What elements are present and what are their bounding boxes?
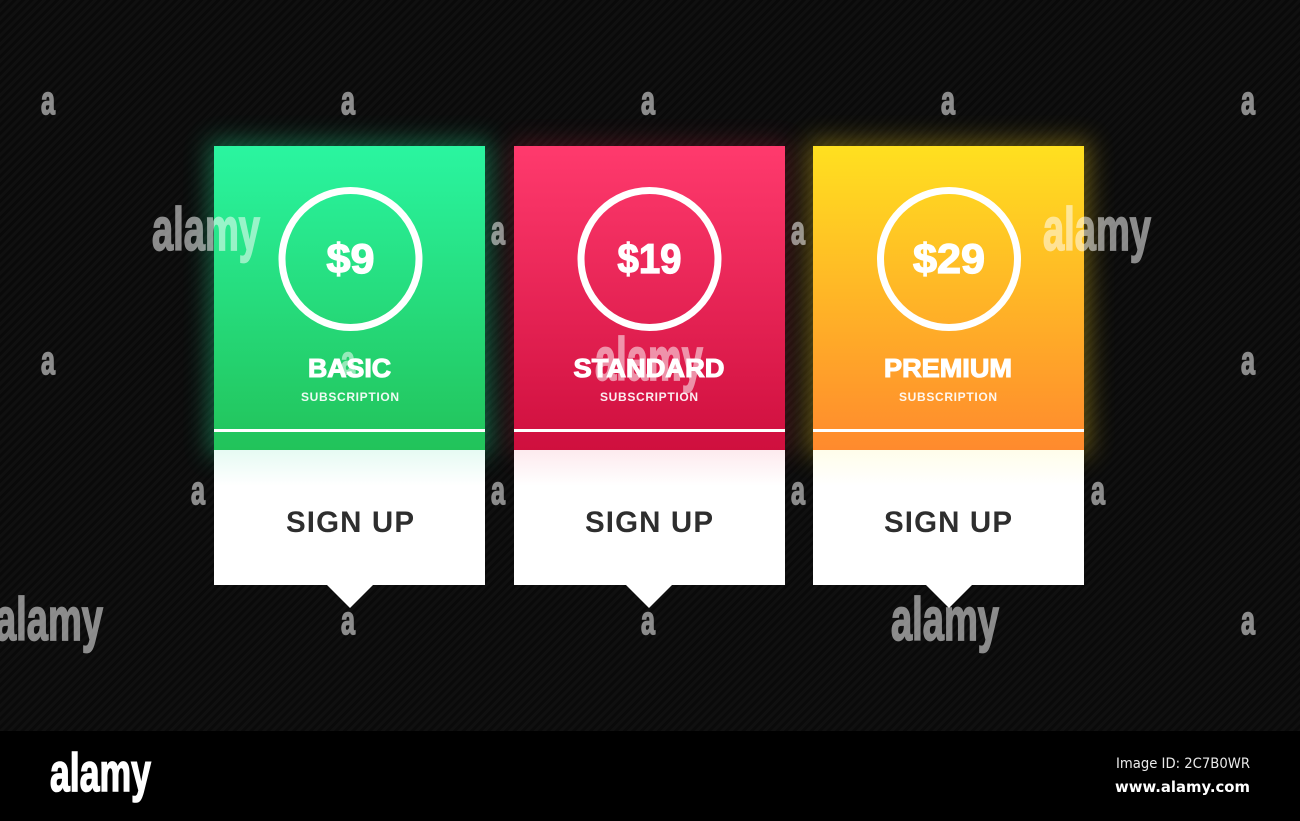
watermark overlay: a <box>491 209 505 253</box>
watermark overlay: a <box>641 599 655 643</box>
premium plan name: PREMIUM <box>884 353 1012 383</box>
watermark overlay: alamy <box>0 586 103 653</box>
watermark overlay <box>0 79 1255 653</box>
standard subscription label: SUBSCRIPTION <box>600 390 698 404</box>
basic subscription label: SUBSCRIPTION <box>301 390 399 404</box>
watermark overlay: a <box>1241 79 1255 123</box>
standard header background <box>514 146 785 450</box>
website: www.alamy.com <box>1115 778 1250 796</box>
panel: premium plan <box>813 146 1084 608</box>
premium header background <box>813 146 1084 450</box>
glow: yellow card <box>807 140 1090 456</box>
premium fade under header <box>813 450 1084 486</box>
premium sign up label: SIGN UP <box>884 506 1012 539</box>
basic price circle <box>282 190 419 328</box>
watermark overlay: a <box>341 79 355 123</box>
watermark overlay: a <box>341 339 355 383</box>
basic plan name: BASIC <box>308 353 391 383</box>
basic fade under header <box>214 450 485 486</box>
basic divider line <box>214 429 485 432</box>
basic header background <box>214 146 485 450</box>
standard price: $19 <box>618 235 682 282</box>
watermark overlay: a <box>341 599 355 643</box>
panel: standard plan <box>514 146 785 608</box>
watermark overlay: a <box>191 469 205 513</box>
glow: green card <box>208 140 491 456</box>
watermark overlay: a <box>941 79 955 123</box>
basic sign up label: SIGN UP <box>286 506 414 539</box>
basic sign up box <box>214 450 485 608</box>
watermark overlay: a <box>1241 599 1255 643</box>
premium subscription label: SUBSCRIPTION <box>899 390 997 404</box>
watermark overlay: alamy <box>891 586 999 653</box>
footer logo: alamy <box>50 743 151 803</box>
standard price circle <box>581 190 718 328</box>
footer bar <box>0 731 1300 821</box>
standard plan name: STANDARD <box>574 353 724 383</box>
watermark overlay: alamy <box>152 196 260 263</box>
watermark overlay: a <box>1091 469 1105 513</box>
watermark overlay: alamy <box>595 326 703 393</box>
basic price: $9 <box>326 235 374 282</box>
premium price circle <box>880 190 1018 328</box>
glow: red card <box>510 142 789 454</box>
standard fade under header <box>514 450 785 486</box>
watermark overlay: a <box>41 339 55 383</box>
watermark overlay: a <box>791 209 805 253</box>
standard sign up box <box>514 450 785 608</box>
panel: basic plan <box>214 146 485 608</box>
watermark overlay: a <box>641 79 655 123</box>
watermark overlay: a <box>41 79 55 123</box>
premium sign up box <box>813 450 1084 608</box>
premium price: $29 <box>913 235 985 282</box>
watermark overlay: a <box>491 469 505 513</box>
watermark overlay: alamy <box>1043 196 1151 263</box>
image id: Image ID: 2C7B0WR <box>1116 756 1250 772</box>
standard divider line <box>514 429 785 432</box>
premium divider line <box>813 429 1084 432</box>
watermark overlay: a <box>791 469 805 513</box>
standard sign up label: SIGN UP <box>585 506 713 539</box>
watermark overlay: a <box>1241 339 1255 383</box>
